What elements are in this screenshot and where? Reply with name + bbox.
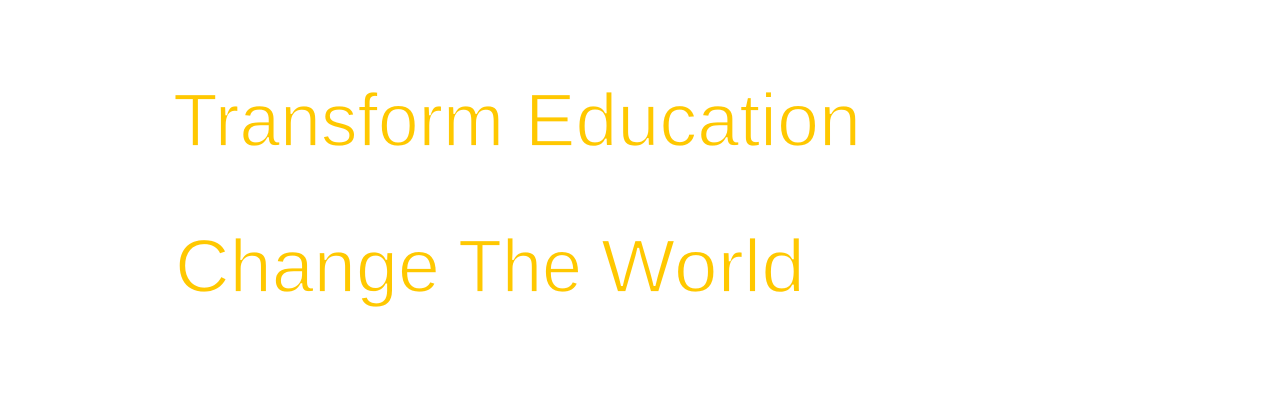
heading line: Transform Education: Transform [173,78,504,162]
heading line: Change The World [175,224,805,308]
heading line: Transform Education: Education [525,78,861,162]
heading line: Change The World: World [601,224,805,308]
heading line: Transform Education [173,78,861,162]
heading line: Change The World: The [458,224,582,308]
heading line: Change The World: Change [175,224,440,308]
